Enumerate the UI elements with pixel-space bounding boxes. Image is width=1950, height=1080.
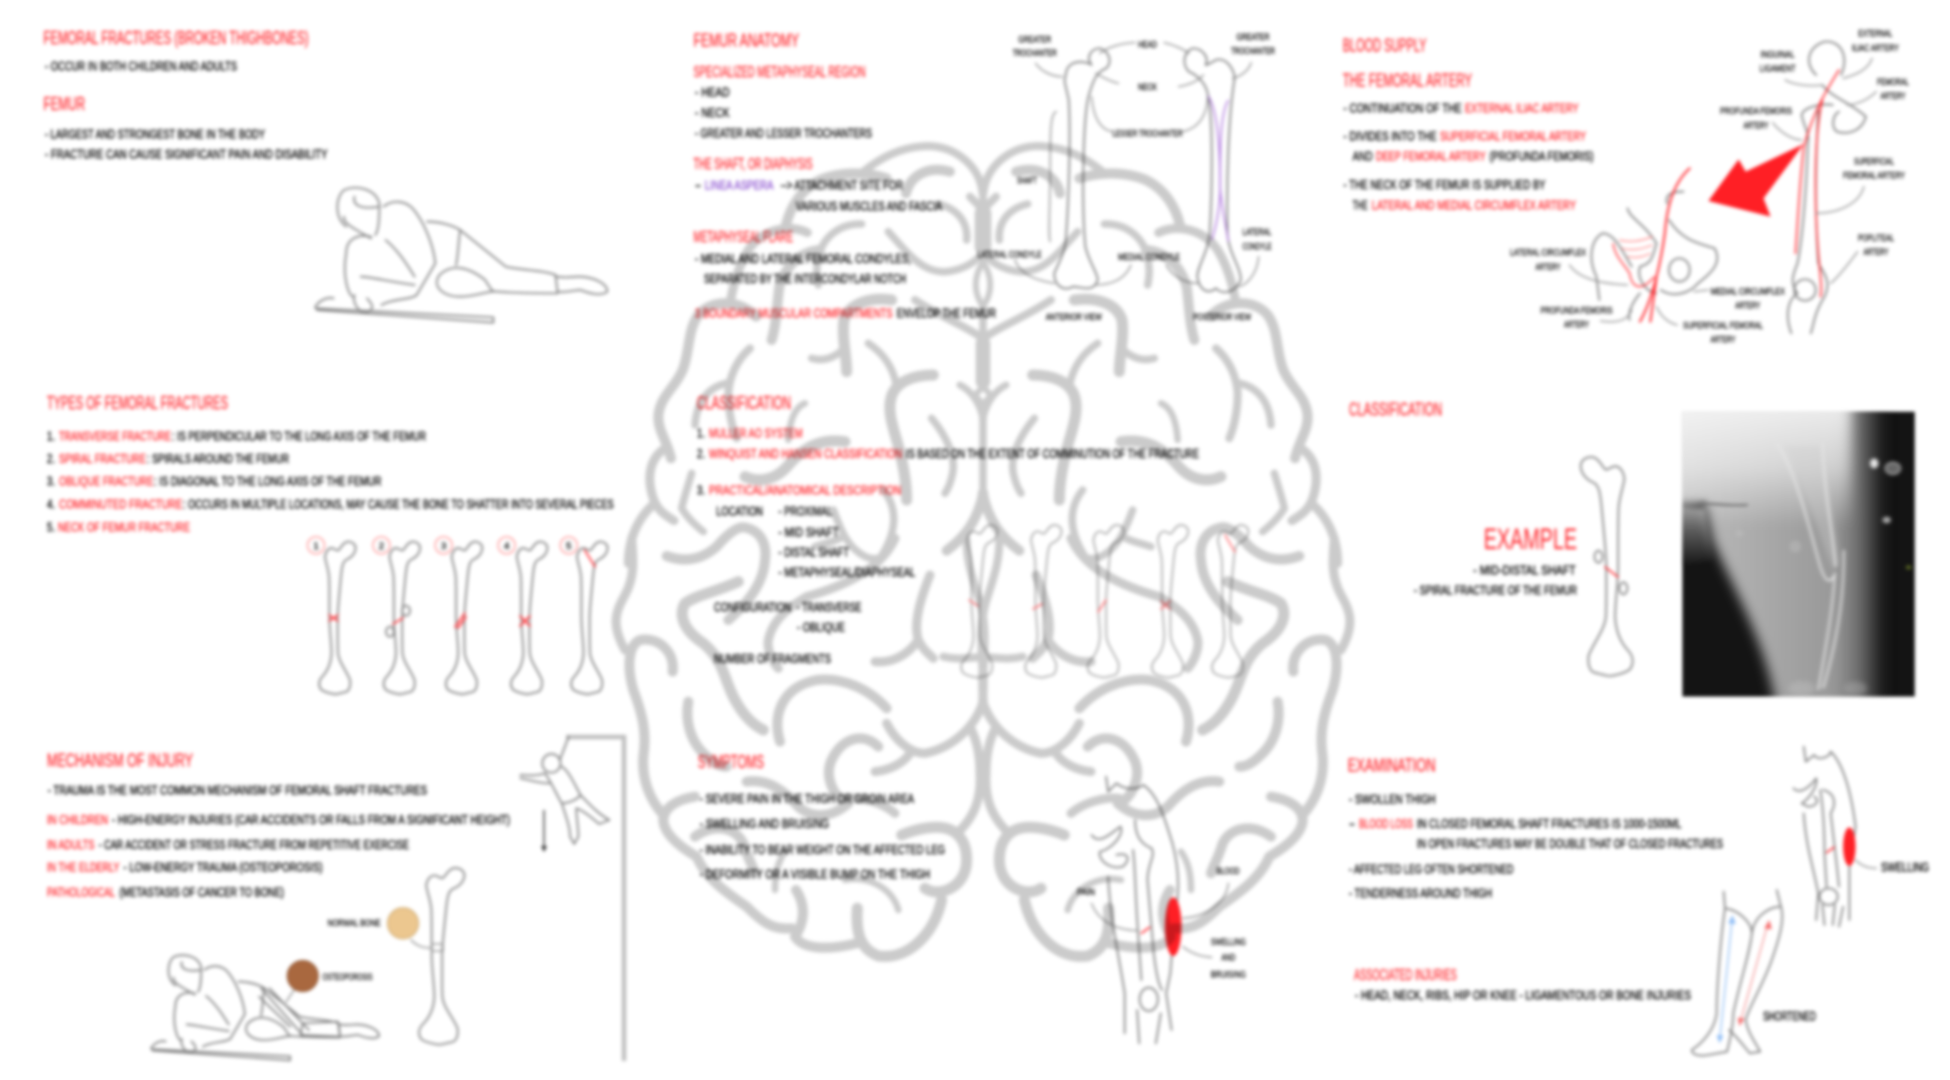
text: location list: - PROXIMAL [778,504,832,519]
text: children [47,812,510,827]
text: compartments: ENVELOP THE FEMUR [897,306,996,320]
heading: blood supply: BLOOD SUPPLY [1343,36,1426,56]
panel: symptoms [698,752,1246,1043]
text: location list: - DISTAL SHAFT [778,544,849,559]
icon: femur 2 spiral: 2 [379,541,384,552]
icon: fall from height frame [566,737,624,1061]
arrow: normal leg length [1717,915,1736,1043]
text: circumflex: THE [1353,198,1368,213]
icon: osteoporotic bone sample [286,960,318,1002]
icon: femur 5 neck [560,537,608,694]
heading: symptoms: SYMPTOMS [698,752,764,772]
text: elderly [47,859,322,874]
icon: anterior femur [1054,48,1110,289]
panel: classification example [1349,393,1915,713]
text: divides: SUPERFICIAL FEMORAL ARTERY [1440,129,1586,144]
heading: examination: EXAMINATION [1348,756,1436,776]
subheading: metaphyseal region: SPECIALIZED METAPHYSEAL REGION [694,64,866,81]
labels: artery names: LATERAL CIRCUMFLEX [1510,248,1586,259]
icon: femur 1 transverse [308,537,356,694]
icon: femur 3 oblique [435,537,482,694]
text: neck supply: - THE NECK OF THE FEMUR IS SUPPLIED BY [1344,177,1546,192]
text: compartments: 3 BOUNDARY MUSCULAR COMPARTMENTS [695,306,893,320]
heading: mechanism: MECHANISM OF INJURY [47,750,193,770]
text: elderly: - LOW-ENERGY TRAUMA (OSTEOPOROSIS) [124,859,322,874]
text: inability: - INABILITY TO BEAR WEIGHT ON THE AFFECTED LEG [700,842,945,857]
labels: femur parts: TROCHANTER [1013,48,1057,59]
text: continuation: EXTERNAL ILIAC ARTERY [1465,100,1579,115]
labels: thigh diagram: PAIN [1077,887,1095,898]
text: adults: - CAR ACCIDENT OR STRESS FRACTURE FROM REPETITIVE EXERCISE [99,837,409,852]
labels: artery names: ARTERY [1880,91,1906,102]
text: divides [1344,129,1586,144]
labels: artery names: PROFUNDA FEMORIS [1720,106,1792,117]
text: children: - HIGH-ENERGY INJURIES (CAR ACCIDENTS OR FALLS FROM A SIGNIFICANT HEIGHT) [112,812,510,827]
text: open fractures: IN OPEN FRACTURES MAY BE DOUBLE THAT OF CLOSED FRACTURES [1417,836,1723,851]
icon: brain outline overlay [616,146,1350,956]
heading: femur anatomy: FEMUR ANATOMY [694,30,799,50]
text: configuration list: - TRANSVERSE [797,599,862,614]
text: neck of femur: 5. [47,519,55,534]
text: swelling: - SWELLING AND BRUISING [700,816,829,831]
icon: right hemisphere [981,146,1350,956]
text: circumflex: LATERAL AND MEDIAL CIRCUMFLEX ARTERY [1372,198,1576,213]
labels: artery names: ARTERY [1744,120,1769,131]
text: location list: - MID SHAFT [778,524,839,539]
labels: artery names: SUPERFICIAL [1854,156,1894,167]
labels: artery names: ARTERY [1735,301,1761,312]
text: trochanters: - GREATER AND LESSER TROCHANTERS [695,125,872,140]
text: fragments: NUMBER OF FRAGMENTS [714,651,831,666]
text: spiral: : SPIRALS AROUND THE FEMUR [147,451,289,466]
text: blood loss: - [1349,816,1355,831]
text: associated list: - HEAD, NECK, RIBS, HIP OR KNEE - LIGAMENTOUS OR BONE INJURIES [1355,988,1691,1003]
text: transverse: : IS PERPENDICULAR TO THE LONG AXIS OF THE FEMUR [172,429,426,444]
text: head: - HEAD [695,85,730,100]
text: neck of femur: NECK OF FEMUR FRACTURE [58,519,190,534]
text: spiral fracture: - SPIRAL FRACTURE OF THE FEMUR [1414,583,1577,598]
text: continuation: - CONTINUATION OF THE [1344,100,1462,115]
text: blood loss: IN CLOSED FEMORAL SHAFT FRACTURES IS 1000-1500ML [1417,816,1681,831]
labels: artery names: ARTERY [1864,247,1889,258]
icon: swollen thigh diagram [1793,747,1876,927]
text: adults [47,837,409,852]
text: mid-distal shaft: - MID-DISTAL SHAFT [1473,563,1576,578]
text: comminuted: 4. [47,497,55,512]
text: deformity: - DEFORMITY OR A VISIBLE BUMP ON THE THIGH [700,867,930,882]
labels: thigh diagram: BLOOD [1216,866,1240,877]
text: divides: - DIVIDES INTO THE [1344,129,1437,144]
text: winquist hansen: 2. [697,446,705,461]
labels: artery names: FEMORAL [1877,77,1909,88]
subheading: shaft: THE SHAFT, OR DIAPHYSIS [694,156,812,173]
panel: blood supply [1343,29,1909,346]
labels: femur parts: POSTERIOR VIEW [1193,312,1251,323]
text: spiral: SPIRAL FRACTURE [59,451,146,466]
text: linea aspera [695,178,903,193]
icon: femur 3 oblique: 3 [441,541,446,552]
labels: femur parts: NECK [1138,82,1157,93]
text: muscles and fascia: VARIOUS MUSCLES AND FASCIA [796,198,942,213]
icon: full leg arterial diagram [1773,42,1876,333]
labels: femur parts: HEAD [1138,39,1157,50]
image: femur x-ray [1679,408,1918,700]
text: neck of femur [47,519,190,534]
chart: anterior and posterior femur diagram [978,32,1275,323]
text: continuation [1344,100,1579,115]
labels: artery names: LIGAMENT [1760,64,1796,75]
labels: artery names: ILIAC ARTERY [1852,43,1899,54]
text: notch: SEPARATED BY THE INTERCONDYLAR NOTCH [704,271,906,286]
panel: types of femoral fractures [47,393,614,694]
text: trauma: - TRAUMA IS THE MOST COMMON MECHANISM OF FEMORAL SHAFT FRACTURES [48,783,427,798]
text: tenderness: - TENDERNESS AROUND THIGH [1349,885,1492,900]
panel: femur anatomy [694,30,1275,323]
labels: artery names: EXTERNAL [1858,29,1892,40]
text: femur bullet 2: - FRACTURE CAN CAUSE SIGNIFICANT PAIN AND DISABILITY [45,147,328,162]
text: adults: IN ADULTS [47,837,95,852]
chart: centre femur row [961,525,1248,678]
text: blood loss: BLOOD LOSS [1359,816,1413,831]
icon: hip arterial detail [1569,168,1717,325]
labels: femur parts: ANTERIOR VIEW [1046,312,1102,323]
text: location list [716,504,915,579]
text: comminuted: : OCCURS IN MULTIPLE LOCATIONS, MAY CAUSE THE BONE TO SHATTER INTO SEVERAL PIECES [183,497,614,512]
text: pathological: (METASTASIS OF CANCER TO BONE) [119,884,284,899]
text: winquist hansen [697,446,1199,461]
text: configuration list: - OBLIQUE [797,619,845,634]
labels: artery names: INGUINAL [1761,49,1795,60]
icon: shortened leg comparison [1692,890,1782,1056]
icon: falling person [520,737,609,844]
labels: femur parts: CONDYLE [1242,241,1272,252]
labels: artery names: POPLITEAL [1858,233,1894,244]
arrow: shortened leg length [1738,920,1772,1026]
text: deep femoral: AND [1353,149,1373,164]
icon: femur 1 transverse: 1 [313,541,319,552]
labels: thigh diagram [1077,866,1246,980]
text: occurrence: - OCCUR IN BOTH CHILDREN AND ADULTS [45,58,237,73]
text: deep femoral: (PROFUNDA FEMORIS) [1490,149,1594,164]
text: transverse: 1. [47,429,55,444]
text: practical description: 3. [697,483,705,498]
text: configuration list [714,599,862,634]
arrow: big red zoom arrow [1708,144,1804,217]
icon: normal bone sample [388,908,443,951]
heading: types: TYPES OF FEMORAL FRACTURES [47,393,228,413]
text: swollen thigh: - SWOLLEN THIGH [1349,792,1436,807]
panel: mechanism of injury [47,737,624,1061]
text: winquist hansen: WINQUIST AND HANSEN CLASSIFICATION [709,446,902,461]
text: winquist hansen: IS BASED ON THE EXTENT OF COMMINUTION OF THE FRACTURE [906,446,1199,461]
text: practical description: PRACTICAL/ANATOMICAL DESCRIPTION [709,483,901,498]
icon: leader lines [1015,43,1259,287]
subheading: flare: METAPHYSEAL FLARE [694,229,793,246]
heading: classification: CLASSIFICATION [1349,400,1442,420]
text: spiral: 2. [47,451,55,466]
text: muller ao [697,425,803,440]
text: muller ao: 1. [697,425,705,440]
labels: artery names: FEMORAL ARTERY [1843,170,1905,181]
heading: example: EXAMPLE [1484,523,1577,556]
text: leg shortened: - AFFECTED LEG OFTEN SHORTENED [1349,861,1514,876]
labels: femur parts: GREATER [1236,32,1270,43]
icon: femur 4 comminuted: 4 [504,541,509,552]
text: pathological [47,884,284,899]
labels: thigh diagram: AND [1221,953,1235,964]
text: oblique [47,473,381,488]
icon: tall femur [419,868,464,1045]
panel: classification centre [697,393,1248,678]
chart: five femur fracture types [308,537,608,694]
labels: artery names: MEDIAL CIRCUMFLEX [1711,286,1785,297]
label: normal bone: NORMAL BONE [328,918,380,929]
labels: artery names: ARTERY [1536,262,1561,273]
text: elderly: IN THE ELDERLY [47,859,120,874]
icon: posterior femur [1184,48,1241,292]
labels: femur parts: SHAFT [1017,175,1037,186]
icon: linea aspera lines [1208,95,1228,242]
labels: femur parts: MEDIAL CONDYLE [1118,252,1180,263]
text: circumflex [1353,198,1576,213]
labels: femur parts: LATERAL CONDYLE [978,249,1042,260]
text: neck: - NECK [695,105,730,120]
icon: example femur with spiral fracture [1581,457,1633,676]
label: shortened: SHORTENED [1763,1009,1816,1024]
text: oblique: : IS DIAGONAL TO THE LONG AXIS OF THE FEMUR [154,473,381,488]
subheading: femoral artery: THE FEMORAL ARTERY [1343,70,1472,90]
text: deep femoral: DEEP FEMORAL ARTERY [1376,149,1486,164]
label: swelling: SWELLING [1881,859,1929,874]
label: osteoporosis: OSTEOPOROSIS [322,972,372,983]
text: transverse: TRANSVERSE FRACTURE [59,429,171,444]
text: deep femoral [1353,149,1594,164]
labels: femur parts: GREATER [1018,34,1051,45]
labels: femur parts [978,32,1275,323]
labels: artery names: PROFUNDA FEMORIS [1540,305,1612,316]
text: pain: - SEVERE PAIN IN THE THIGH OR GROIN AREA [700,791,914,806]
text: blood loss [1349,816,1681,831]
panel: femoral fractures intro [44,28,607,323]
text: location list: LOCATION [716,504,763,519]
labels: femur parts: LESSER TROCHANTER [1112,129,1183,140]
text: oblique: OBLIQUE FRACTURE [59,473,154,488]
labels: artery names: ARTERY [1710,335,1736,346]
text: linea aspera: - [695,178,701,193]
icon: patient lying on ground [315,188,607,323]
text: transverse [47,429,426,444]
labels: thigh diagram: SWELLING [1211,937,1246,948]
text: location list: - METAPHYSEAL/DIAPHYSEAL [778,564,915,579]
text: linea aspera: --> ATTACHMENT SITE FOR [781,178,903,193]
icon: femur 5 neck: 5 [566,541,571,552]
icon: femur 2 spiral [373,537,420,694]
icon: patient with osteoporotic femur [151,955,379,1060]
labels: thigh diagram: BRUISING [1211,969,1246,980]
labels: femur parts: LATERAL [1242,227,1272,238]
text: linea aspera: LINEA ASPERA [705,178,774,193]
text: configuration list: CONFIGURATION [714,599,791,614]
labels: artery names: SUPERFICIAL FEMORAL [1683,320,1763,331]
heading: femur: FEMUR [44,94,85,114]
heading: classification: CLASSIFICATION [697,393,791,413]
labels: artery names [1510,29,1909,346]
icon: left hemisphere [616,146,985,956]
text: muller ao: MULLER AO SYSTEM [709,425,803,440]
text: oblique: 3. [47,473,55,488]
labels: artery names: ARTERY [1564,320,1589,331]
icon: bone overlay on hip [259,988,340,1037]
panel: examination [1348,747,1929,1056]
text: condyles: - MEDIAL AND LATERAL FEMORAL CONDYLES, [695,251,911,266]
arrow: direction of fall [541,810,547,852]
heading: associated injuries: ASSOCIATED INJURIES [1354,967,1457,984]
labels: femur parts: TROCHANTER [1231,46,1275,57]
text: pathological: PATHOLOGICAL [47,884,115,899]
icon: femur 4 comminuted [498,537,547,694]
text: spiral [47,451,289,466]
text: femur bullet 1: - LARGEST AND STRONGEST BONE IN THE BODY [45,127,265,142]
text: children: IN CHILDREN [47,812,108,827]
text: comminuted [47,497,614,512]
icon: thigh with swelling and bruising [1092,777,1228,1043]
heading: femoral fractures: FEMORAL FRACTURES (BROKEN THIGHBONES) [44,28,308,48]
text: comminuted: COMMINUTED FRACTURE [59,497,183,512]
